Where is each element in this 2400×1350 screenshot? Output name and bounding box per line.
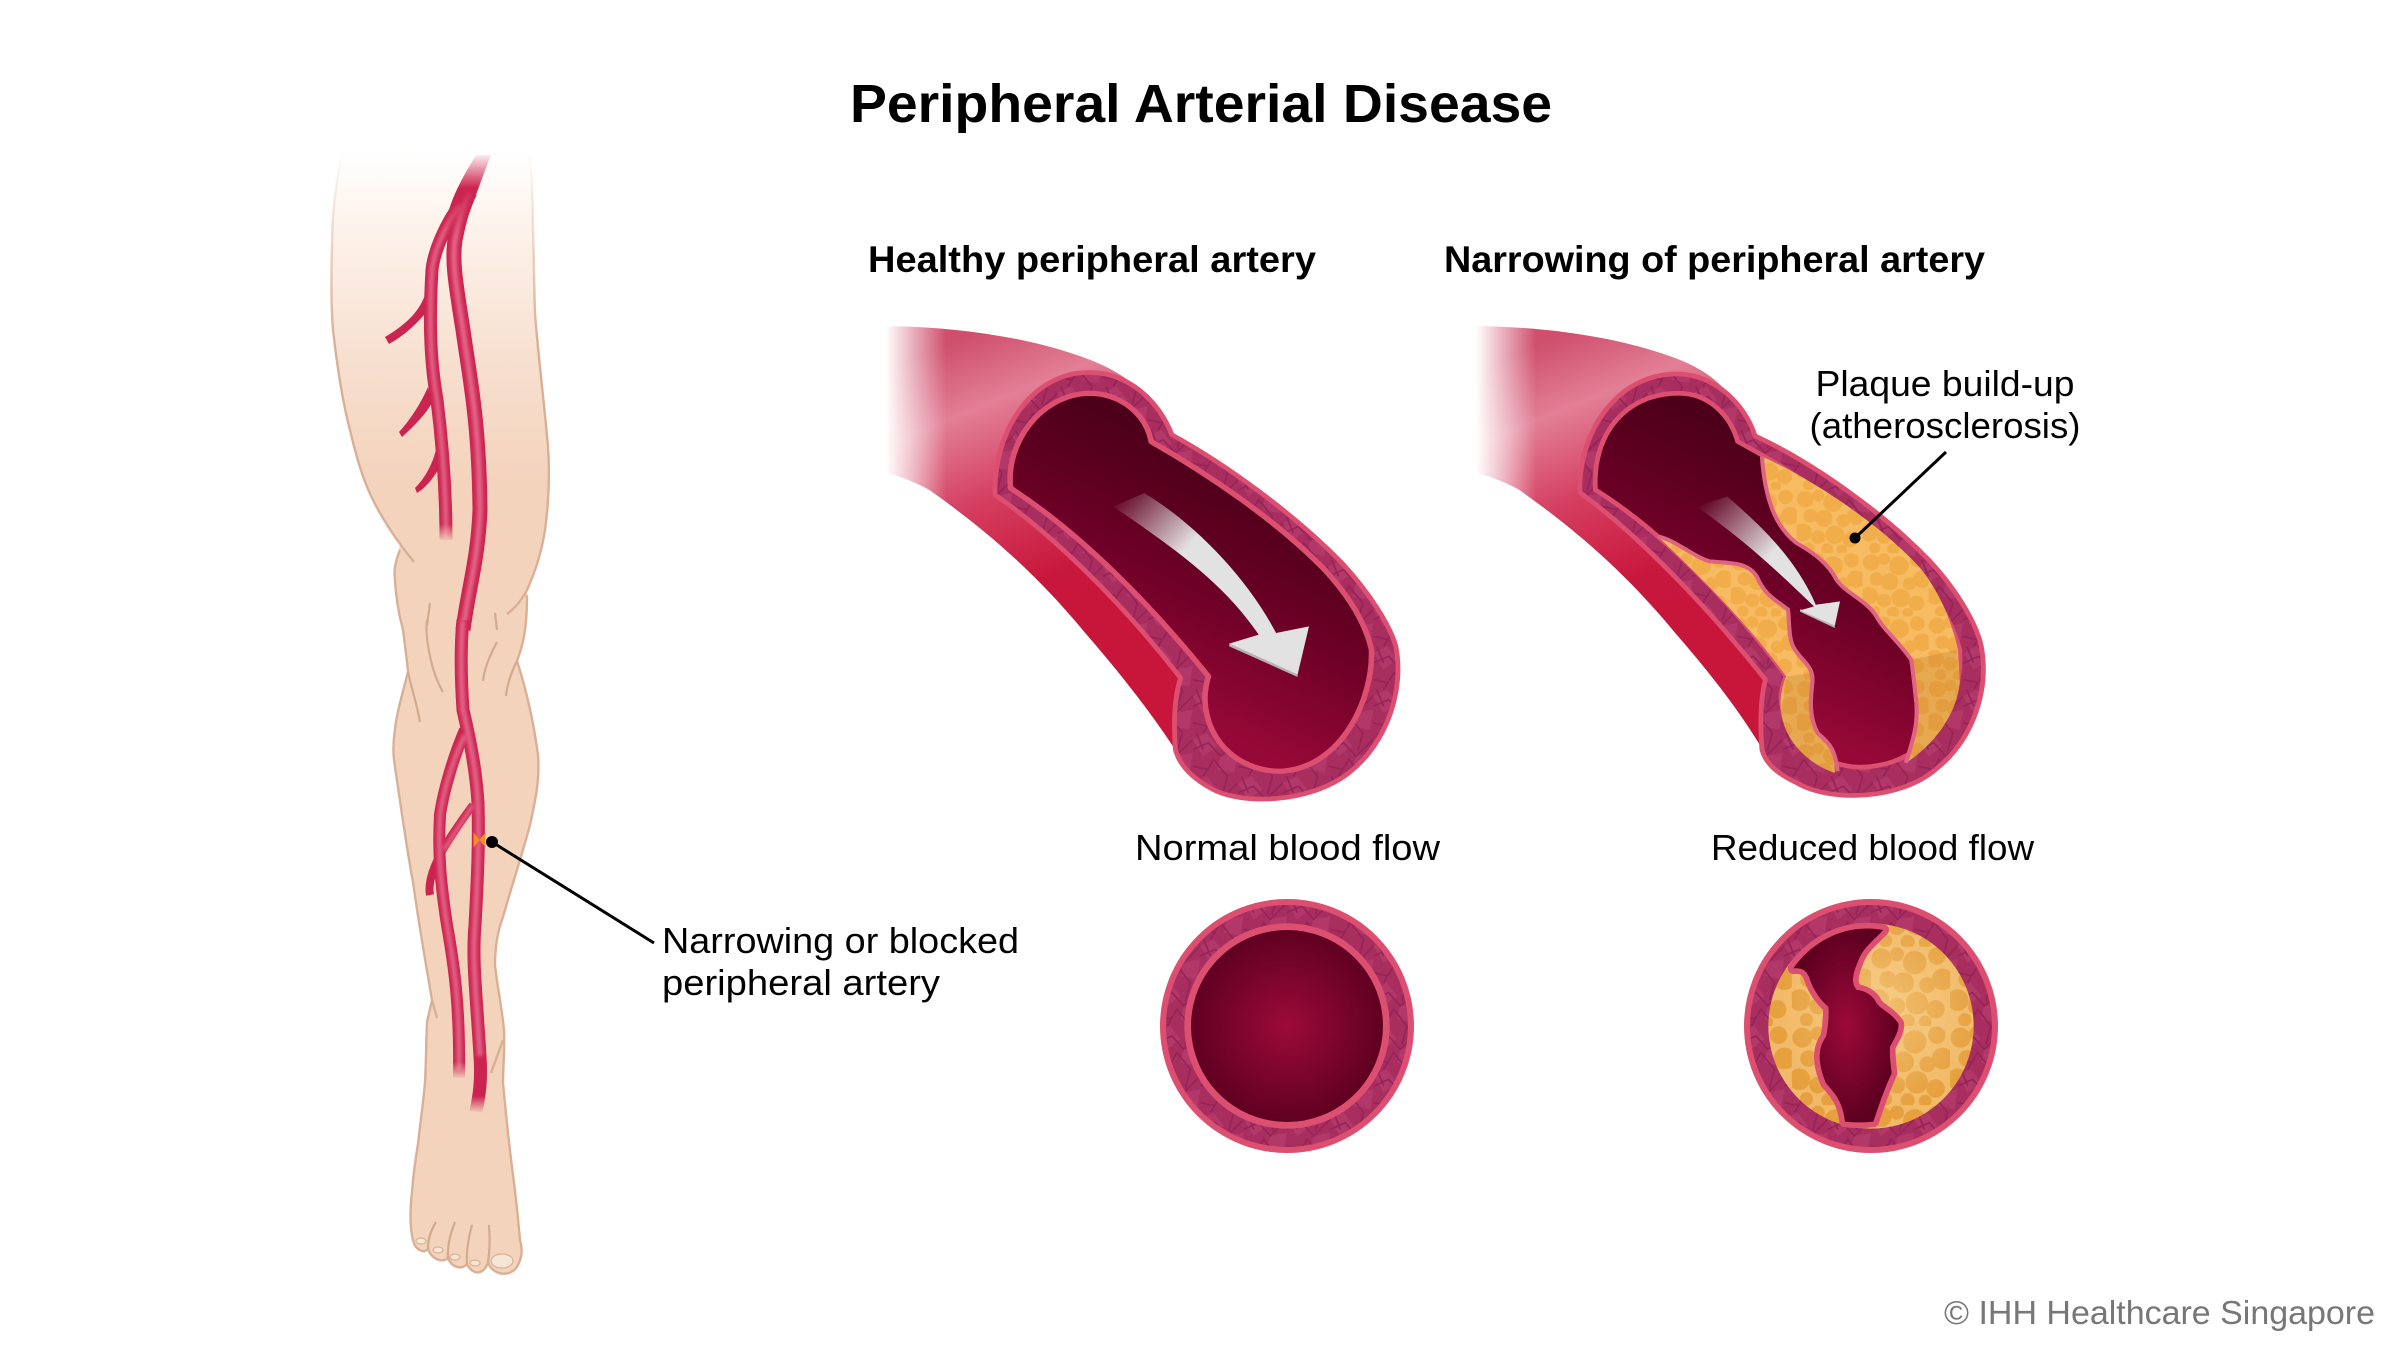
lumen — [1010, 393, 1372, 771]
tube exterior — [888, 326, 1178, 746]
outer wall — [1163, 902, 1411, 1150]
plaque fill — [1768, 923, 1974, 1129]
arrow: reduced blood flow — [1696, 496, 1840, 628]
label: plaque build-up: (atherosclerosis) — [1810, 405, 2080, 446]
lumen — [1595, 393, 1960, 767]
artery wall — [995, 372, 1398, 799]
label: narrowing or blocked peripheral artery — [662, 920, 1019, 1003]
heading: narrowing: Narrowing of peripheral artery — [1444, 239, 1985, 280]
heading: healthy: Healthy peripheral artery — [868, 239, 1316, 280]
leg silhouette — [331, 150, 549, 1274]
tube exterior — [1478, 326, 1763, 744]
cross-section: narrowed artery — [1747, 902, 1995, 1150]
narrowed lumen — [1793, 928, 1899, 1122]
artery wall — [1580, 374, 1983, 795]
label: reduced blood flow: Reduced blood flow — [1711, 827, 2035, 868]
label: normal blood flow: Normal blood flow — [1135, 827, 1441, 868]
plaque: lower — [1658, 536, 1838, 773]
knee creases — [408, 603, 517, 722]
illustration: healthy artery longitudinal section — [877, 326, 1398, 799]
illustration: leg with arteries — [331, 150, 549, 1274]
label: narrowing or blocked peripheral artery: Narrowing or blocked — [662, 920, 1019, 961]
cross-section: normal artery — [1163, 902, 1411, 1150]
upper arteries — [385, 155, 491, 630]
callout: plaque leader line — [1850, 452, 1946, 544]
plaque: upper — [1762, 457, 1960, 763]
lumen — [1188, 927, 1386, 1125]
illustration: narrowed artery longitudinal section — [1467, 326, 1983, 795]
arrow: normal blood flow — [1113, 493, 1309, 677]
toes — [416, 1222, 513, 1268]
title: Peripheral Arterial Disease — [850, 74, 1552, 134]
lower arteries — [429, 620, 487, 1113]
copyright: © IHH Healthcare Singapore — [1944, 1294, 2375, 1331]
narrowing marker — [474, 834, 485, 846]
outer wall — [1747, 902, 1995, 1150]
callout: narrowing leader line — [486, 836, 654, 943]
label: plaque build-up — [1810, 363, 2080, 446]
label: plaque build-up: Plaque build-up — [1816, 363, 2074, 404]
label: narrowing or blocked peripheral artery: peripheral artery — [662, 962, 940, 1003]
